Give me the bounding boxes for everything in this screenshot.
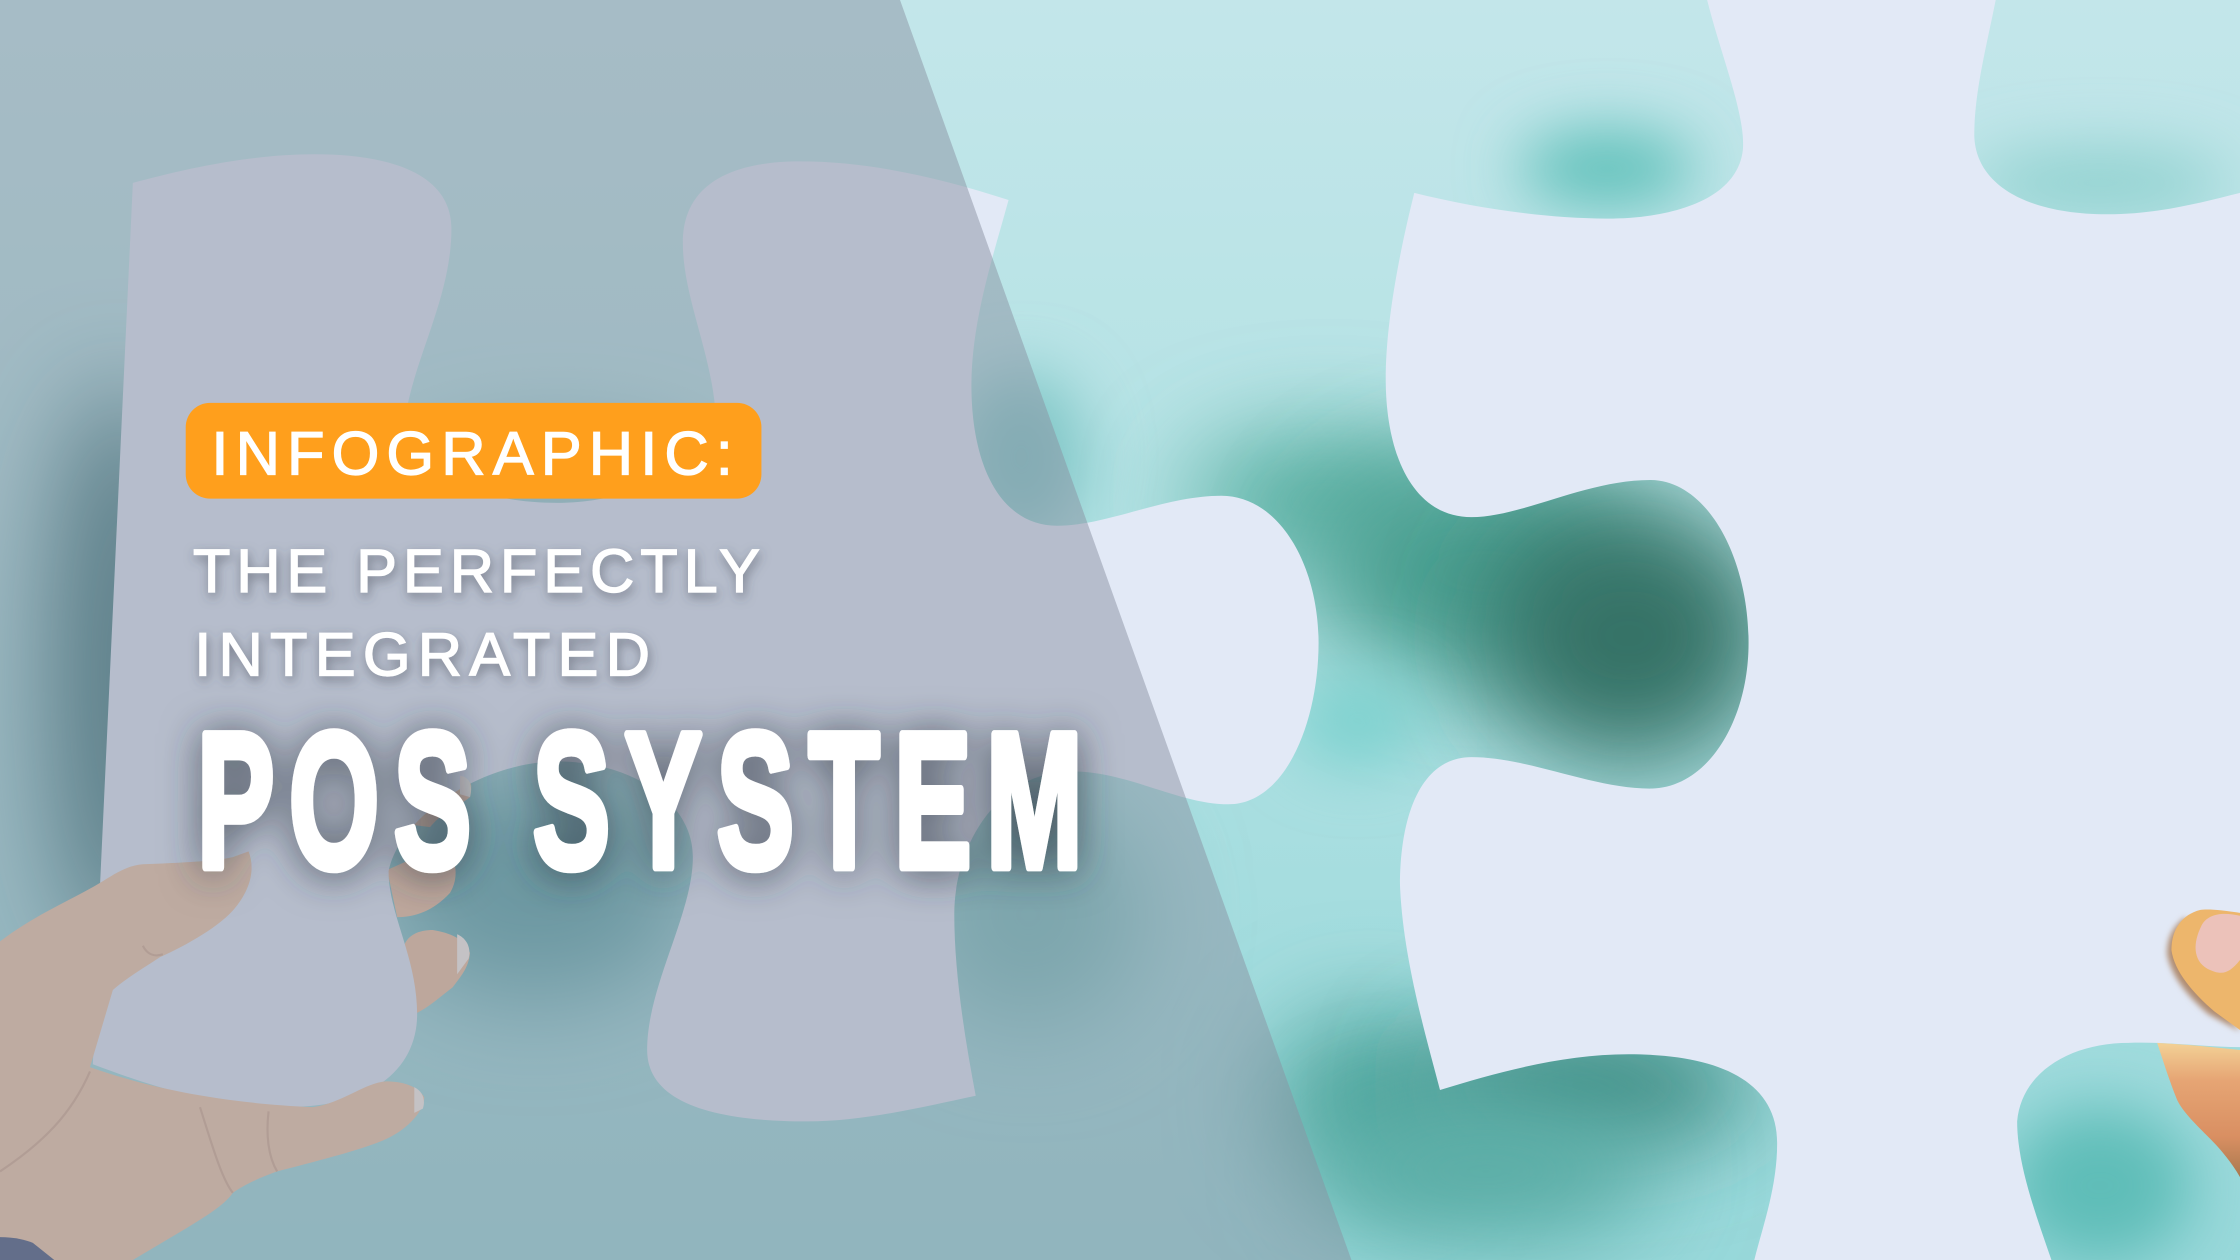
heading: the perfectly integrated	[193, 537, 760, 690]
heading: the perfectly integrated: INTEGRATED	[194, 621, 650, 690]
translucent diagonal overlay	[0, 0, 1351, 1260]
icon: left hand holding puzzle piece	[0, 776, 471, 1260]
badge: INFOGRAPHIC	[186, 403, 761, 499]
puzzle piece: right piece	[1386, 0, 2240, 1260]
heading: the perfectly integrated: THE PERFECTLY	[193, 537, 760, 606]
icon: fingers behind left puzzle piece	[387, 774, 471, 1013]
puzzle piece: left piece held by hand	[93, 154, 1319, 1121]
title: POS SYSTEM: POS SYSTEM	[197, 693, 1083, 908]
badge: INFOGRAPHIC: INFOGRAPHIC:	[211, 419, 733, 488]
icon: right hand fingers	[2157, 909, 2240, 1177]
